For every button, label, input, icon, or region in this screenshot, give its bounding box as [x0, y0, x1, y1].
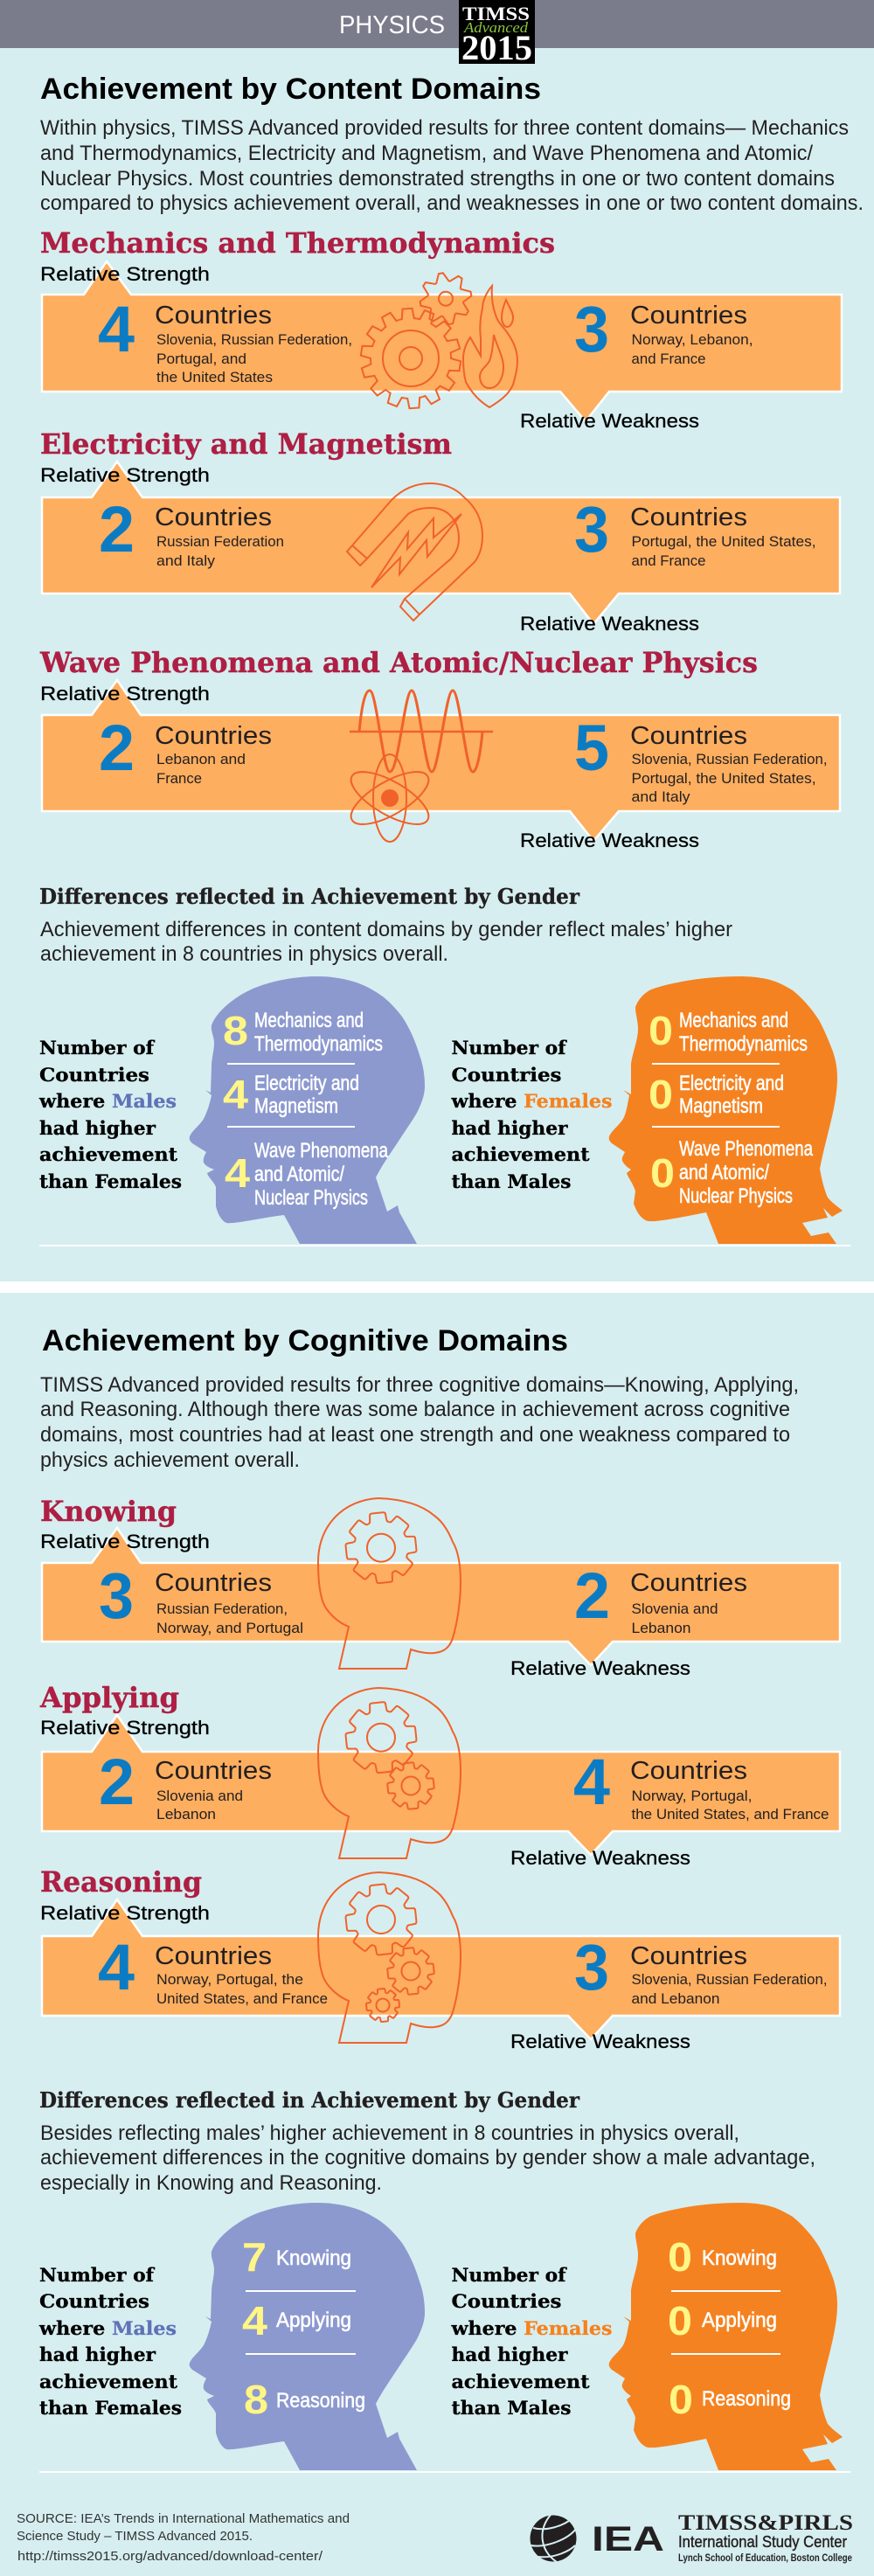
label: relative strength: Relative Strength [40, 464, 210, 486]
count: reasoning: 0 [669, 2377, 693, 2422]
weakness countries: and France [631, 552, 706, 569]
label: wave [254, 1139, 389, 1210]
count: electricity: 4 [223, 1072, 248, 1117]
text: males caption: Number of [39, 1038, 156, 1059]
strength count: 2 [99, 1746, 135, 1818]
paragraph: gender differences in cognitive domains: especially in Knowing and Reasoning. [40, 2171, 382, 2195]
label: wave: Nuclear Physics [254, 1186, 368, 1210]
weakness countries: and France [631, 351, 706, 367]
icon: head with two gears [318, 1688, 461, 1858]
label: wave: Wave Phenomena [254, 1139, 389, 1163]
weakness countries: Norway, Lebanon, [631, 331, 753, 348]
strength countries [155, 722, 272, 787]
label: relative weakness: Relative Weakness [520, 410, 699, 432]
band with strength and weakness arrows [42, 261, 842, 421]
weakness countries: Portugal, the United States, [631, 770, 816, 787]
weakness countries: Countries [630, 1569, 747, 1597]
label: electricity: Magnetism [679, 1094, 763, 1118]
label: knowing: Knowing [702, 2246, 777, 2270]
subheading: gender differences in content domains: Differences reflected in Achievement by Gender [39, 884, 579, 909]
strength countries [155, 302, 352, 385]
strength count: 4 [98, 293, 135, 365]
source note [17, 2511, 350, 2564]
panel: wave phenomena and atomic/nuclear physics [39, 646, 840, 851]
label: relative weakness: Relative Weakness [520, 613, 699, 635]
text: females caption: than Males [451, 1171, 572, 1193]
label: relative weakness: Relative Weakness [510, 2031, 690, 2052]
weakness countries [630, 722, 827, 805]
strength countries: Portugal, and [156, 351, 246, 367]
heading: Knowing [40, 1495, 177, 1528]
text: females caption: had higher [451, 1118, 568, 1140]
TIMSS & PIRLS center credit: TIMSS&PIRLS [678, 2511, 853, 2535]
text: males caption [38, 2265, 182, 2420]
strength countries: Countries [155, 1942, 272, 1970]
female head: content domain counts [609, 976, 843, 1244]
intro paragraph: cognitive domains [40, 1373, 799, 1472]
strength count: 4 [98, 1931, 135, 2003]
text: females caption: had higher [451, 2344, 568, 2366]
paragraph: gender differences in cognitive domains: Besides reflecting males’ higher achievement in 8 countries in physics overall, [40, 2121, 739, 2145]
label: relative strength: Relative Strength [40, 1717, 210, 1739]
male head: cognitive domain counts [190, 2203, 425, 2470]
strength countries [155, 1569, 303, 1636]
text: males caption: had higher [39, 1118, 156, 1140]
label: relative strength: Relative Strength [40, 683, 210, 705]
strength countries: Russian Federation, [156, 1600, 288, 1617]
IEA wordmark: IEA [592, 2520, 664, 2559]
TIMSS Advanced 2015 logo: TIMSS [462, 3, 530, 24]
TIMSS Advanced 2015 logo: Advanced [463, 19, 529, 36]
TIMSS & PIRLS center credit [678, 2511, 853, 2564]
count: mechanics: 8 [223, 1008, 248, 1053]
count: applying: 4 [242, 2298, 267, 2343]
label: mechanics: Thermodynamics [679, 1032, 808, 1056]
strength countries: Countries [155, 1569, 272, 1597]
strength countries: France [156, 770, 202, 787]
icon: head with one gear [318, 1498, 461, 1669]
label: mechanics: Thermodynamics [254, 1032, 383, 1056]
weakness countries [630, 1942, 827, 2007]
intro paragraph: cognitive domains: and Reasoning. Although there was some balance in achievement across cognitive [40, 1398, 790, 1421]
heading: Reasoning [40, 1865, 202, 1899]
text: females caption: where Females [450, 2318, 612, 2340]
weakness countries: Countries [630, 1757, 747, 1785]
label: mechanics: Mechanics and [679, 1009, 788, 1032]
intro paragraph: cognitive domains: physics achievement overall. [40, 1448, 300, 1472]
label: reasoning: Reasoning [702, 2387, 791, 2411]
label: relative weakness: Relative Weakness [520, 830, 699, 851]
header banner [0, 0, 874, 67]
band with strength and weakness arrows [42, 1899, 840, 2039]
icon: magnet and lightning [347, 483, 482, 621]
text: females caption: achievement [451, 2371, 590, 2393]
strength countries: and Italy [156, 552, 216, 569]
strength countries: Slovenia and [156, 1788, 243, 1804]
text: males caption: Countries [39, 2291, 149, 2313]
strength countries: Lebanon and [156, 751, 246, 767]
text: males caption: Number of [39, 2265, 156, 2287]
text: females caption: Number of [451, 2265, 567, 2287]
intro paragraph: content domains [40, 116, 864, 215]
text: females caption: achievement [451, 1144, 590, 1166]
label: wave: Wave Phenomena [679, 1137, 814, 1161]
text: females caption: where Females [450, 1091, 612, 1113]
label: wave: Nuclear Physics [679, 1184, 793, 1208]
strength countries: Countries [155, 503, 272, 531]
panel: reasoning [40, 1865, 840, 2052]
weakness countries: Lebanon [631, 1620, 690, 1636]
weakness countries: Slovenia, Russian Federation, [631, 1971, 827, 1988]
weakness countries: Portugal, the United States, [631, 533, 816, 550]
strength countries [155, 1942, 328, 2007]
text: females caption: Countries [451, 1065, 561, 1087]
source note: Science Study – TIMSS Advanced 2015. [17, 2529, 253, 2544]
count: wave: 0 [650, 1150, 675, 1196]
text: males caption: where Males [38, 2318, 177, 2340]
weakness countries: and Lebanon [631, 1990, 720, 2007]
label: relative weakness: Relative Weakness [510, 1657, 690, 1679]
weakness countries: Slovenia, Russian Federation, [631, 751, 827, 767]
weakness countries: Countries [630, 503, 747, 531]
strength count: 2 [99, 712, 135, 784]
weakness countries [630, 1569, 747, 1636]
weakness count: 3 [574, 493, 609, 566]
paragraph: gender differences in content domains: Achievement differences in content domains by gender reflect males’ higher [40, 918, 732, 941]
label: reasoning: Reasoning [276, 2389, 365, 2413]
source note: http://timss2015.org/advanced/download-center/ [17, 2549, 323, 2564]
text: females caption [450, 1038, 612, 1193]
band with strength and weakness arrows [42, 1528, 840, 1665]
text: males caption: had higher [39, 2344, 156, 2366]
label: mechanics: Mechanics and [254, 1009, 364, 1032]
strength countries [155, 1757, 272, 1823]
label: relative weakness: Relative Weakness [510, 1847, 690, 1869]
band with strength and weakness arrows [42, 1715, 840, 1855]
weakness count: 3 [574, 293, 609, 365]
intro paragraph: cognitive domains: domains, most countries had at least one strength and one weakness compared to [40, 1423, 790, 1447]
text: males caption: where Males [38, 1091, 177, 1113]
white section divider [0, 1281, 874, 1293]
count: reasoning: 8 [244, 2377, 268, 2422]
weakness countries: and Italy [631, 788, 690, 805]
text: females caption [450, 2265, 612, 2420]
strength countries [155, 503, 284, 569]
icon: gears and flame [357, 268, 517, 412]
female head: cognitive domain counts [609, 2203, 843, 2470]
weakness count: 2 [574, 1559, 610, 1632]
icon: head with three gears [318, 1872, 461, 2043]
label: wave: and Atomic/ [679, 1161, 769, 1184]
label: electricity: Electricity and [254, 1072, 359, 1095]
source note: SOURCE: IEA’s Trends in International Mathematics and [17, 2511, 350, 2526]
weakness countries: Slovenia and [631, 1600, 718, 1617]
panel: mechanics and thermodynamics [40, 226, 842, 432]
strength countries: Countries [155, 1757, 272, 1785]
count: electricity: 0 [649, 1072, 673, 1117]
label: mechanics [254, 1009, 383, 1056]
band with strength and weakness arrows [42, 680, 840, 841]
panel: knowing [40, 1495, 840, 1679]
header title: PHYSICS [339, 11, 445, 39]
strength countries: Norway, and Portugal [156, 1620, 303, 1636]
heading: Mechanics and Thermodynamics [40, 226, 555, 260]
label: wave [679, 1137, 814, 1208]
section title: content domains: Achievement by Content Domains [40, 73, 541, 106]
label: mechanics [679, 1009, 808, 1056]
weakness countries: Countries [630, 1942, 747, 1970]
heading: Electricity and Magnetism [40, 427, 452, 461]
TIMSS Advanced 2015 logo [459, 0, 535, 67]
label: applying: Applying [276, 2309, 351, 2332]
heading: Applying [39, 1681, 179, 1714]
strength countries: Russian Federation [156, 533, 284, 550]
weakness countries [630, 503, 816, 569]
text: females caption: Number of [451, 1038, 567, 1059]
heading: Wave Phenomena and Atomic/Nuclear Physics [39, 646, 758, 679]
band with strength and weakness arrows [42, 462, 840, 624]
text: males caption: achievement [39, 2371, 177, 2393]
weakness countries: the United States, and France [631, 1806, 829, 1823]
weakness count: 4 [573, 1746, 610, 1818]
intro paragraph: content domains: and Thermodynamics, Electricity and Magnetism, and Wave Phenomena and Atomic/ [40, 142, 813, 165]
TIMSS & PIRLS center credit: International Study Center [678, 2533, 847, 2551]
text: males caption: than Females [39, 2398, 182, 2420]
icon: wave and atom [343, 691, 493, 842]
weakness countries [630, 302, 753, 367]
strength count: 2 [99, 493, 135, 566]
count: applying: 0 [668, 2298, 692, 2343]
strength countries: United States, and France [156, 1990, 328, 2007]
TIMSS Advanced 2015 logo: 2015 [461, 28, 532, 67]
weakness count: 3 [574, 1931, 609, 2003]
text: males caption: Countries [39, 1065, 149, 1087]
label: electricity [679, 1072, 784, 1118]
subheading: gender differences in cognitive domains: Differences reflected in Achievement by Gender [39, 2087, 579, 2113]
paragraph: gender differences in content domains: achievement in 8 countries in physics overall. [40, 942, 448, 966]
label: relative strength: Relative Strength [40, 263, 210, 285]
weakness countries: Countries [630, 302, 747, 330]
label: knowing: Knowing [276, 2246, 351, 2270]
count: knowing: 7 [242, 2234, 267, 2280]
label: wave: and Atomic/ [254, 1163, 344, 1186]
panel: applying [39, 1681, 840, 1869]
strength countries: Lebanon [156, 1806, 216, 1823]
panel: electricity and magnetism [40, 427, 840, 635]
paragraph: gender differences in cognitive domains [40, 2121, 815, 2195]
intro paragraph: content domains: Within physics, TIMSS Advanced provided results for three content domains— Mechanics [40, 116, 849, 140]
male head: content domain counts [190, 976, 425, 1244]
label: applying: Applying [702, 2309, 777, 2332]
count: knowing: 0 [668, 2234, 692, 2280]
label: electricity: Electricity and [679, 1072, 784, 1095]
strength countries: the United States [156, 369, 273, 385]
text: females caption: than Males [451, 2398, 572, 2420]
strength count: 3 [99, 1559, 134, 1632]
icon: IEA globe [530, 2515, 577, 2562]
count: mechanics: 0 [649, 1008, 673, 1053]
text: males caption: achievement [39, 1144, 177, 1166]
section title: cognitive domains: Achievement by Cognitive Domains [42, 1324, 568, 1357]
intro paragraph: content domains: compared to physics achievement overall, and weaknesses in one or two content domains. [40, 191, 864, 215]
label: electricity [254, 1072, 359, 1118]
intro paragraph: content domains: Nuclear Physics. Most countries demonstrated strengths in one or two content domains [40, 167, 835, 191]
label: electricity: Magnetism [254, 1094, 338, 1118]
strength countries: Slovenia, Russian Federation, [156, 331, 352, 348]
weakness countries: Countries [630, 722, 747, 750]
weakness count: 5 [574, 712, 609, 784]
strength countries: Countries [155, 722, 272, 750]
text: males caption [38, 1038, 182, 1193]
intro paragraph: cognitive domains: TIMSS Advanced provided results for three cognitive domains—Knowing, Applying, [40, 1373, 799, 1397]
label: relative strength: Relative Strength [40, 1902, 210, 1924]
paragraph: gender differences in content domains [40, 918, 732, 966]
text: females caption: Countries [451, 2291, 561, 2313]
paragraph: gender differences in cognitive domains: achievement differences in the cognitive domains by gender show a male advantage, [40, 2146, 815, 2170]
strength countries: Countries [155, 302, 272, 330]
count: wave: 4 [225, 1150, 250, 1196]
text: males caption: than Females [39, 1171, 182, 1193]
weakness countries: Norway, Portugal, [631, 1788, 752, 1804]
strength countries: Norway, Portugal, the [156, 1971, 303, 1988]
weakness countries [630, 1757, 829, 1823]
label: relative strength: Relative Strength [40, 1531, 210, 1552]
